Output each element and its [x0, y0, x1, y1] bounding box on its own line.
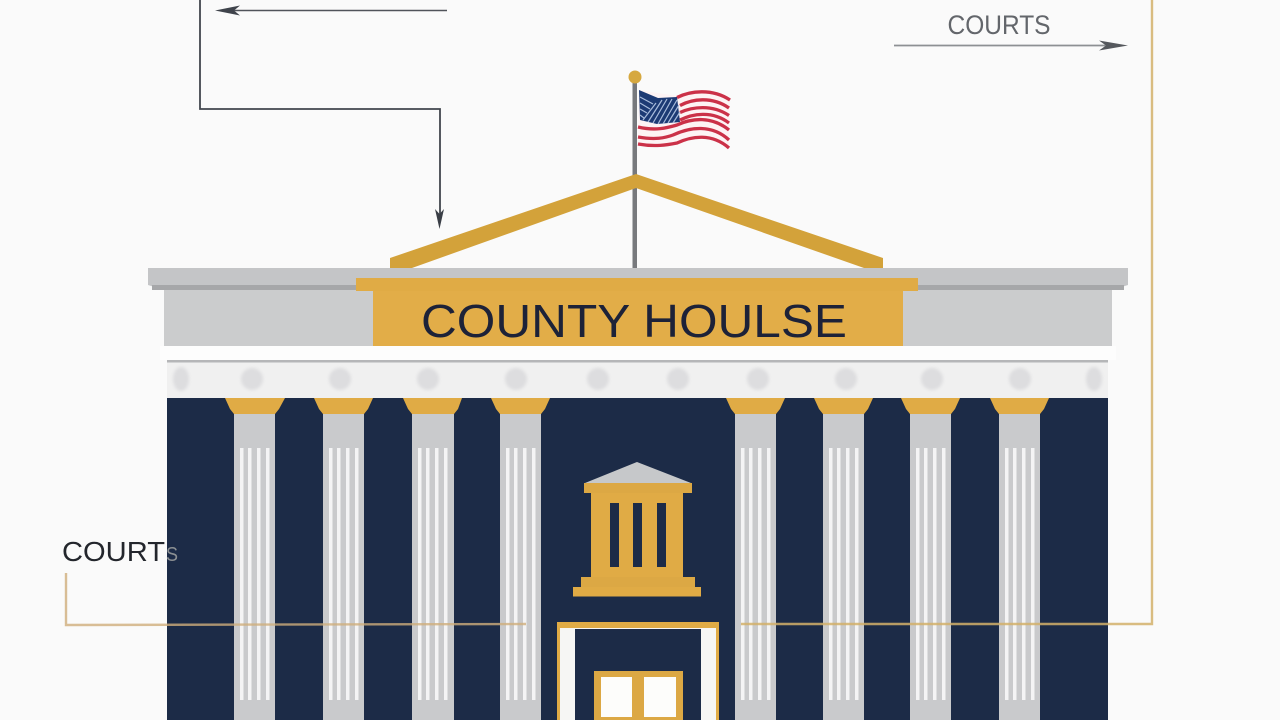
white band below frieze	[160, 346, 1116, 360]
column 5	[726, 398, 785, 720]
label: courts top right: COURTS	[948, 10, 1050, 40]
icon: small gold courthouse emblem	[573, 462, 701, 596]
label: courts lower left: S	[166, 544, 178, 566]
sign text: COUNTY HOULSE	[421, 295, 847, 347]
column 1	[225, 398, 285, 720]
connector: left gold line	[66, 573, 526, 625]
icon: american flag	[638, 90, 730, 149]
building facade	[167, 398, 1108, 720]
entablature with rosettes	[167, 360, 1108, 398]
flag pole with finial	[628, 70, 642, 268]
pediment: gold gable roof	[390, 174, 883, 268]
arrow: elbow connector down to the pediment	[200, 0, 444, 229]
sign: county house plaque	[356, 278, 918, 347]
column 3	[403, 398, 462, 720]
doorway with gold frame and white jambs	[557, 622, 719, 720]
column 4	[491, 398, 550, 720]
column 2	[314, 398, 373, 720]
cornice and upper frieze	[148, 268, 1128, 346]
connector: right gold line	[741, 0, 1152, 624]
arrow: top left pointing left	[215, 6, 447, 16]
column 6	[814, 398, 873, 720]
column 7	[901, 398, 960, 720]
door windows	[594, 671, 683, 720]
column 8	[990, 398, 1049, 720]
label: courts lower left: COURT	[62, 536, 165, 567]
arrow: top right pointing right	[894, 40, 1128, 50]
